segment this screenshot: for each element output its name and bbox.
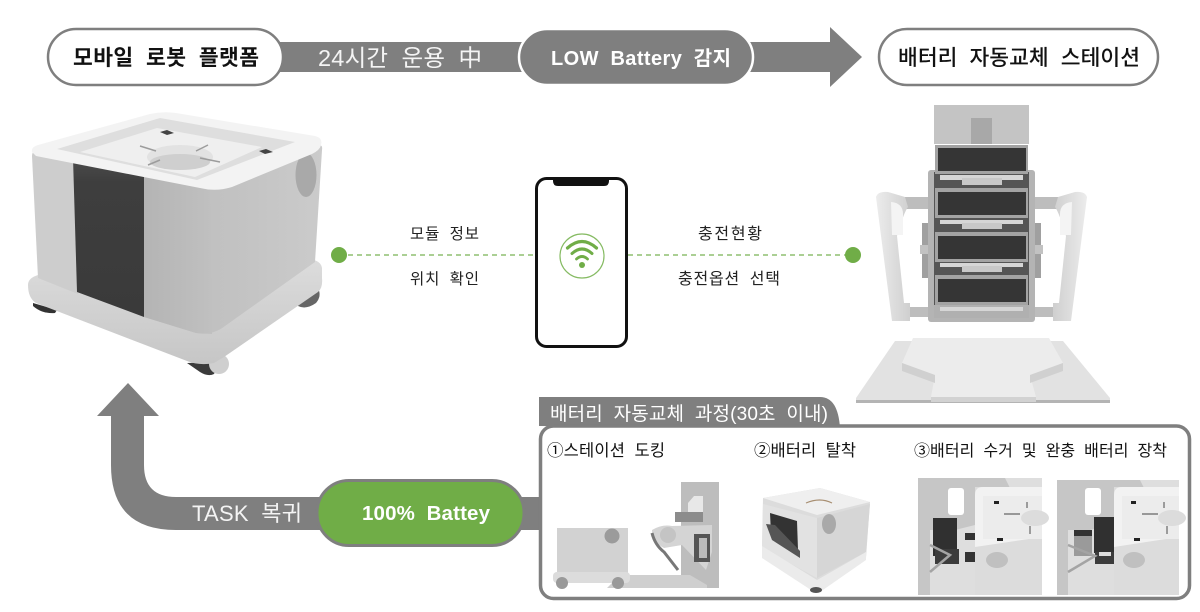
cartridge 1 xyxy=(935,145,1028,174)
step 3 image: installation xyxy=(1057,480,1186,595)
panel tab xyxy=(539,397,840,428)
step 3 image: removal xyxy=(918,478,1049,595)
cartridge 3 xyxy=(935,232,1028,262)
pill: battery swap station: 배터리 자동교체 스테이션 xyxy=(898,46,1140,70)
label: position check: 위치 확인 xyxy=(410,270,479,288)
label: module info: 모듈 정보 xyxy=(410,225,479,243)
pill: mobile robot platform: 모바일 로봇 플랫폼 xyxy=(73,46,259,70)
left face xyxy=(32,152,78,294)
dark panel xyxy=(73,158,144,317)
frame xyxy=(928,170,1035,322)
cartridge 4 xyxy=(935,275,1028,305)
illustration: battery swap station xyxy=(856,105,1110,403)
panel frame xyxy=(540,426,1190,598)
panel: battery swap process xyxy=(539,397,1190,598)
wheels xyxy=(33,303,57,313)
pill: 100% battery: 100% Battey xyxy=(362,502,491,525)
connector: robot to phone xyxy=(331,247,536,263)
base bumper xyxy=(28,260,322,364)
top latches xyxy=(160,130,174,135)
connector: phone to station xyxy=(628,247,861,263)
top arrow: process flow xyxy=(270,27,862,87)
icon: smartphone with wifi xyxy=(536,178,626,346)
side hole xyxy=(296,153,316,197)
step 1 image: docking side view xyxy=(553,482,719,589)
top recess xyxy=(57,118,295,180)
pill: low battery detection xyxy=(519,29,753,85)
panel title: 배터리 자동교체 과정(30초 이내) xyxy=(550,403,828,425)
step 1 title: ①스테이션 도킹 xyxy=(547,441,665,460)
right arm xyxy=(1032,192,1087,321)
label: task return: TASK 복귀 xyxy=(192,501,302,526)
cartridge 2 xyxy=(935,188,1028,218)
step 2 image: battery removal xyxy=(762,488,870,593)
step 2 title: ②배터리 탈착 xyxy=(754,441,856,460)
centre and right faces xyxy=(144,146,322,334)
docking plate xyxy=(856,341,1110,402)
pill: low battery detection: LOW Battery 감지 xyxy=(551,47,731,70)
illustration: mobile robot xyxy=(28,112,322,375)
top face xyxy=(32,112,321,190)
step 3 title: ③배터리 수거 및 완충 배터리 장착 xyxy=(914,442,1167,460)
label: charge status: 충전현황 xyxy=(698,225,762,243)
label: 24h operation: 24시간 운용 中 xyxy=(318,45,482,71)
pill: 100% battery xyxy=(317,480,524,546)
pill: mobile robot platform xyxy=(48,29,283,85)
label: charge option select: 충전옵션 선택 xyxy=(678,270,780,288)
pill: battery swap station xyxy=(879,29,1158,85)
return arrow xyxy=(97,383,542,530)
mast xyxy=(934,105,1029,144)
left arm xyxy=(876,192,931,321)
top ring and spokes xyxy=(147,145,213,169)
